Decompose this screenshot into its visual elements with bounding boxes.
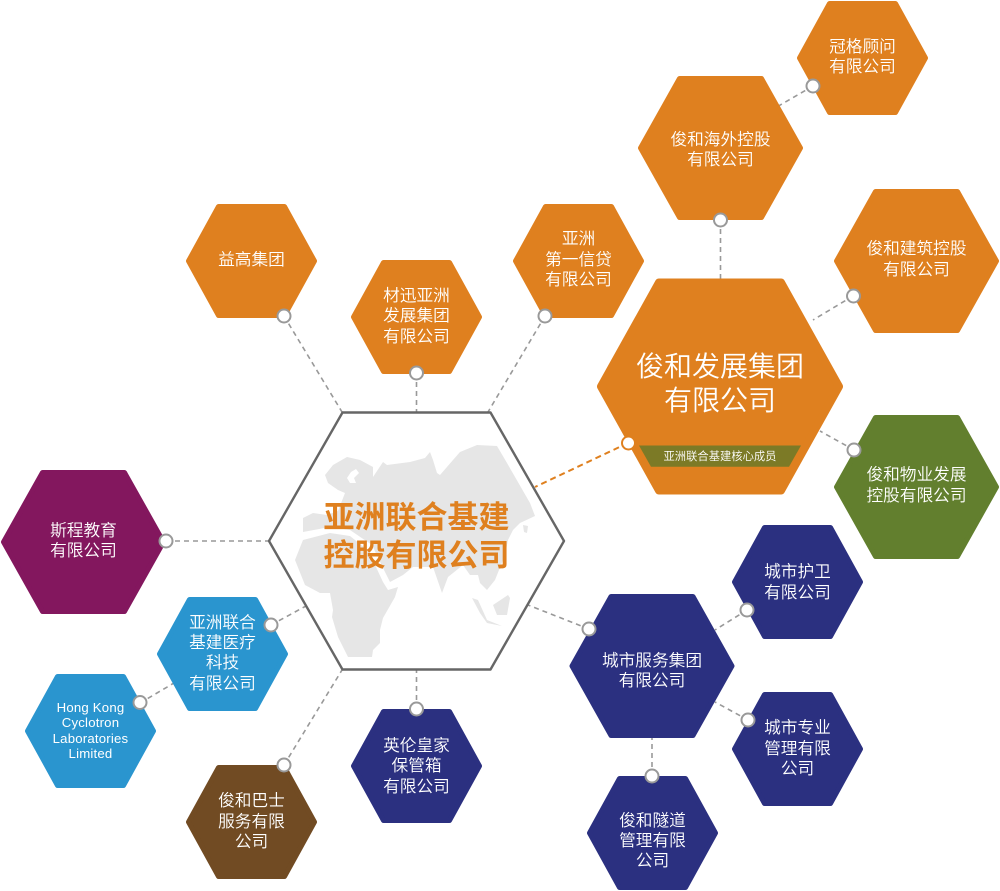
hexagon: 城市服务集团有限公司: 城市服务集团 bbox=[602, 651, 702, 670]
hexagon: 俊和发展集团有限公司: 有限公司 bbox=[664, 385, 776, 416]
hexagon: 益高集团 bbox=[188, 206, 314, 316]
banner: 亚洲联合基建核心成员: 亚洲联合基建核心成员 bbox=[664, 449, 776, 463]
hexagon: 亚洲联合基建医疗科技有限公司: 有限公司 bbox=[189, 674, 256, 693]
world map silhouette bbox=[295, 445, 535, 657]
hexagon: Hong Kong Cyclotron Laboratories Limited: Cyclotron bbox=[62, 715, 119, 730]
hexagon: 俊和隧道管理有限公司: 俊和隧道 bbox=[619, 811, 686, 830]
hexagon: 亚洲联合基建医疗科技有限公司: 科技 bbox=[206, 653, 239, 672]
hexagon: 俊和发展集团有限公司 bbox=[601, 282, 839, 490]
hexagon: 材迅亚洲发展集团有限公司: 有限公司 bbox=[383, 327, 450, 346]
hexagon: 城市护卫有限公司 bbox=[734, 528, 860, 636]
hexagon: 城市服务集团有限公司: 有限公司 bbox=[619, 671, 685, 690]
hexagon: 城市服务集团有限公司 bbox=[572, 596, 732, 736]
hexagon: 英伦皇家保管箱有限公司: 英伦皇家 bbox=[383, 736, 450, 755]
hexagon: 城市护卫有限公司: 有限公司 bbox=[764, 583, 831, 602]
hexagon: 俊和海外控股有限公司: 俊和海外控股 bbox=[670, 130, 771, 149]
central hexagon outline bbox=[269, 412, 564, 670]
hexagon: 俊和隧道管理有限公司: 管理有限 bbox=[619, 831, 686, 850]
hexagon: 俊和巴士服务有限公司: 俊和巴士 bbox=[218, 791, 285, 810]
banner: 亚洲联合基建核心成员 bbox=[639, 446, 801, 467]
hexagon: 俊和物业发展控股有限公司: 控股有限公司 bbox=[866, 486, 967, 505]
hexagon: 俊和巴士服务有限公司 bbox=[188, 768, 314, 876]
hexagon: 城市护卫有限公司: 城市护卫 bbox=[764, 562, 831, 581]
hexagon: 城市专业管理有限公司: 城市专业 bbox=[764, 718, 831, 737]
hexagon: 亚洲第一信贷有限公司: 有限公司 bbox=[545, 270, 612, 289]
hexagon: 俊和建筑控股有限公司: 俊和建筑控股 bbox=[866, 239, 967, 258]
hexagon: 亚洲联合基建医疗科技有限公司: 基建医疗 bbox=[189, 633, 256, 652]
central hexagon: 亚洲联合基建控股有限公司 bbox=[269, 412, 564, 670]
hexagon: 材迅亚洲发展集团有限公司: 材迅亚洲 bbox=[383, 286, 450, 305]
hexagon: 俊和建筑控股有限公司 bbox=[836, 192, 996, 330]
hexagon: 俊和隧道管理有限公司: 公司 bbox=[636, 851, 669, 870]
central hexagon: 亚洲联合基建控股有限公司: 控股有限公司 bbox=[324, 538, 510, 573]
hexagon: 材迅亚洲发展集团有限公司 bbox=[354, 262, 480, 372]
hexagon: 城市专业管理有限公司 bbox=[734, 694, 860, 804]
hexagon: 城市专业管理有限公司: 管理有限 bbox=[764, 739, 831, 758]
hexagon: 亚洲第一信贷有限公司 bbox=[516, 206, 642, 316]
hexagon: 亚洲联合基建医疗科技有限公司 bbox=[160, 600, 286, 708]
hexagon: 俊和物业发展控股有限公司 bbox=[836, 418, 996, 556]
hexagon: 俊和隧道管理有限公司 bbox=[590, 778, 716, 888]
company name: 亚洲联合基建 bbox=[324, 500, 510, 535]
hexagon: 俊和建筑控股有限公司: 有限公司 bbox=[883, 260, 950, 279]
hexagon: 俊和巴士服务有限公司: 服务有限 bbox=[218, 812, 285, 831]
hexagon: 俊和海外控股有限公司: 有限公司 bbox=[687, 150, 754, 169]
hexagon: 俊和海外控股有限公司 bbox=[640, 78, 800, 218]
hexagon: 英伦皇家保管箱有限公司: 有限公司 bbox=[383, 777, 450, 796]
hexagon: 英伦皇家保管箱有限公司 bbox=[354, 712, 480, 820]
hexagon: 冠格顾问有限公司 bbox=[800, 4, 926, 112]
hexagon: 斯程教育有限公司: 有限公司 bbox=[50, 541, 117, 560]
hexagon: 冠格顾问有限公司: 冠格顾问 bbox=[829, 37, 896, 56]
hexagon: 斯程教育有限公司: 斯程教育 bbox=[50, 521, 117, 540]
hexagon: 益高集团: 益高集团 bbox=[218, 250, 285, 269]
hexagon: 英伦皇家保管箱有限公司: 保管箱 bbox=[391, 756, 442, 775]
hexagon: 冠格顾问有限公司: 有限公司 bbox=[829, 57, 896, 76]
hexagon: 俊和巴士服务有限公司: 公司 bbox=[235, 832, 268, 851]
connector lines bbox=[140, 86, 854, 776]
connector nodes bbox=[134, 80, 860, 782]
hexagon: 亚洲第一信贷有限公司: 第一信贷 bbox=[545, 250, 612, 269]
hexagon: Hong Kong Cyclotron Laboratories Limited: Laboratories bbox=[53, 731, 129, 746]
hexagon: Hong Kong Cyclotron Laboratories Limited: Hong Kong bbox=[57, 700, 124, 715]
hexagon: 俊和物业发展控股有限公司: 俊和物业发展 bbox=[866, 465, 967, 484]
hexagon: Hong Kong Cyclotron Laboratories Limited: Limited bbox=[69, 746, 112, 761]
hexagon: 亚洲第一信贷有限公司: 亚洲 bbox=[562, 229, 595, 248]
hexagon: 材迅亚洲发展集团有限公司: 发展集团 bbox=[383, 306, 450, 325]
hexagon: 俊和发展集团有限公司: 俊和发展集团 bbox=[636, 351, 804, 382]
hexagon: 斯程教育有限公司 bbox=[4, 472, 164, 612]
hexagon: 城市专业管理有限公司: 公司 bbox=[781, 759, 814, 778]
hexagon: Hong Kong Cyclotron Laboratories Limited bbox=[28, 676, 154, 786]
hexagon: 亚洲联合基建医疗科技有限公司: 亚洲联合 bbox=[189, 613, 256, 632]
